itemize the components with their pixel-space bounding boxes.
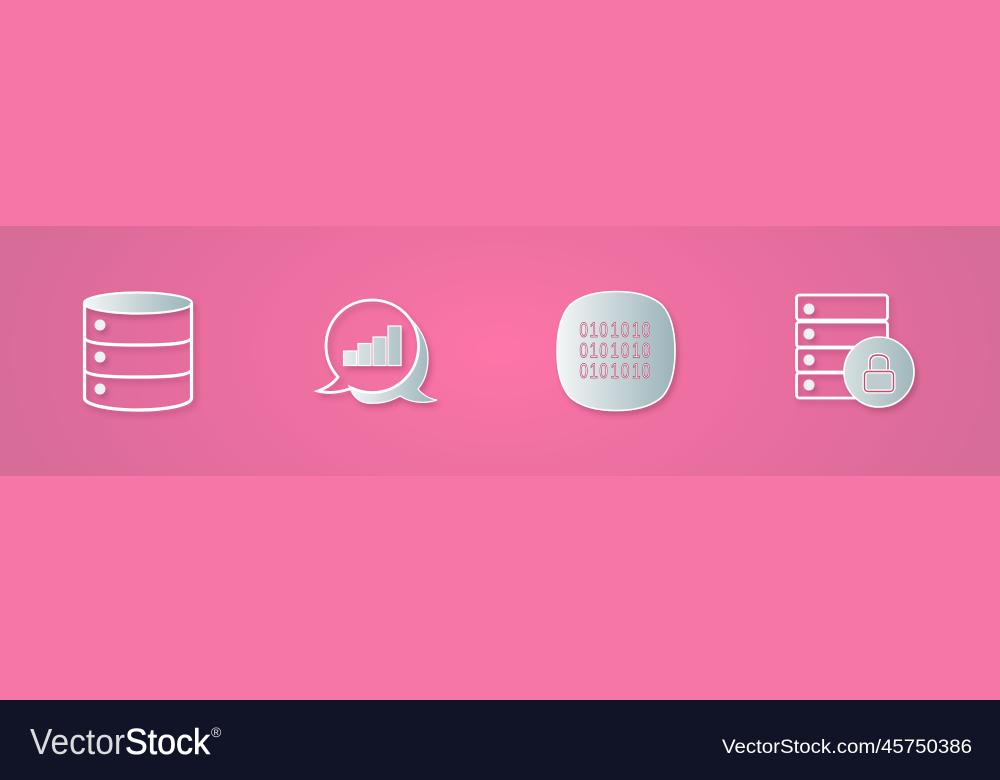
registered mark: ® [211,724,222,740]
central darker band [0,226,1000,476]
VectorStock logo [30,721,222,762]
padlock [864,355,894,392]
binary digits: 0101010 [580,338,650,362]
binary digits: 0101010 [580,358,650,383]
squircle tile [557,292,675,410]
logo wordmark light: Vector [30,721,125,762]
icon: speech bubbles with bar chart [318,300,437,403]
logo wordmark bold: Stock [125,721,211,762]
server indicator dots [804,304,814,390]
icon: binary code squircle [557,292,675,410]
lock badge [844,337,914,407]
bar chart [344,326,401,366]
icon: database cylinder [84,292,192,410]
image id text: VectorStock.com/45750386 [722,737,972,758]
binary digits: 0101010 [580,317,650,342]
database indicator dots [94,320,106,394]
database top disc [84,292,192,314]
rear speech bubble [349,314,437,403]
icon: server rack with padlock [796,295,914,407]
server rows [796,295,888,398]
binary digits [580,317,650,383]
database body outline [84,303,192,410]
front speech bubble [318,300,418,392]
footer bar [0,700,1000,780]
